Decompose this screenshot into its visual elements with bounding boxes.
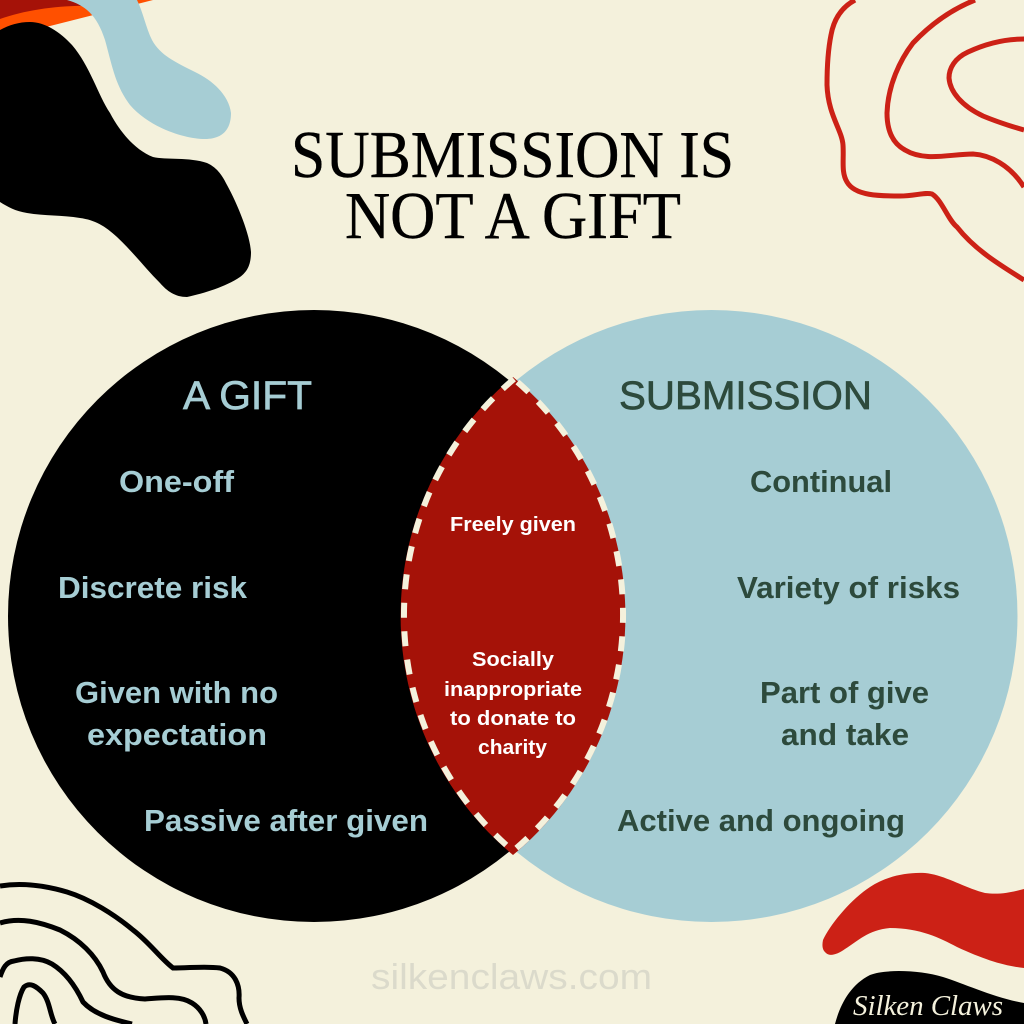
overlap lens dashed outline — [404, 379, 623, 851]
list: shared traits: Socially — [472, 648, 555, 671]
list: submission traits: Continual — [750, 464, 892, 499]
title: SUBMISSION IS — [291, 118, 734, 192]
decoration: bottom-right red wave — [822, 873, 1024, 968]
list: shared traits — [444, 513, 582, 759]
list: gift traits: Given with no — [75, 675, 278, 710]
logo text: Silken Claws — [853, 990, 1003, 1022]
heading: submission: SUBMISSION — [619, 374, 872, 418]
list: gift traits: One-off — [119, 464, 235, 499]
list: submission traits: Variety of risks — [737, 570, 960, 605]
list: gift traits — [58, 464, 428, 838]
list: shared traits: Freely given — [450, 513, 576, 536]
decoration: top-right red contour lines — [827, 0, 1024, 280]
heading: a gift: A GIFT — [183, 374, 312, 418]
website footer: silkenclaws.com — [371, 956, 652, 997]
list: gift traits: expectation — [87, 717, 267, 752]
list: gift traits: Passive after given — [144, 803, 428, 838]
list: shared traits: to donate to — [450, 707, 576, 730]
list: shared traits: charity — [478, 736, 548, 759]
list: submission traits: Part of give — [760, 675, 929, 710]
logo badge — [835, 971, 1024, 1024]
title — [291, 118, 734, 253]
circle: submission — [406, 310, 1018, 922]
list: shared traits: inappropriate — [444, 678, 582, 701]
list: gift traits: Discrete risk — [58, 570, 248, 605]
overlap lens — [401, 377, 625, 855]
decoration: bottom-left black contour lines — [0, 885, 247, 1024]
title: NOT A GIFT — [345, 179, 681, 253]
decoration: top-left blobs — [0, 0, 251, 297]
list: submission traits: and take — [781, 717, 909, 752]
list: submission traits — [617, 464, 960, 838]
circle: a gift — [8, 310, 620, 922]
list: submission traits: Active and ongoing — [617, 803, 905, 838]
